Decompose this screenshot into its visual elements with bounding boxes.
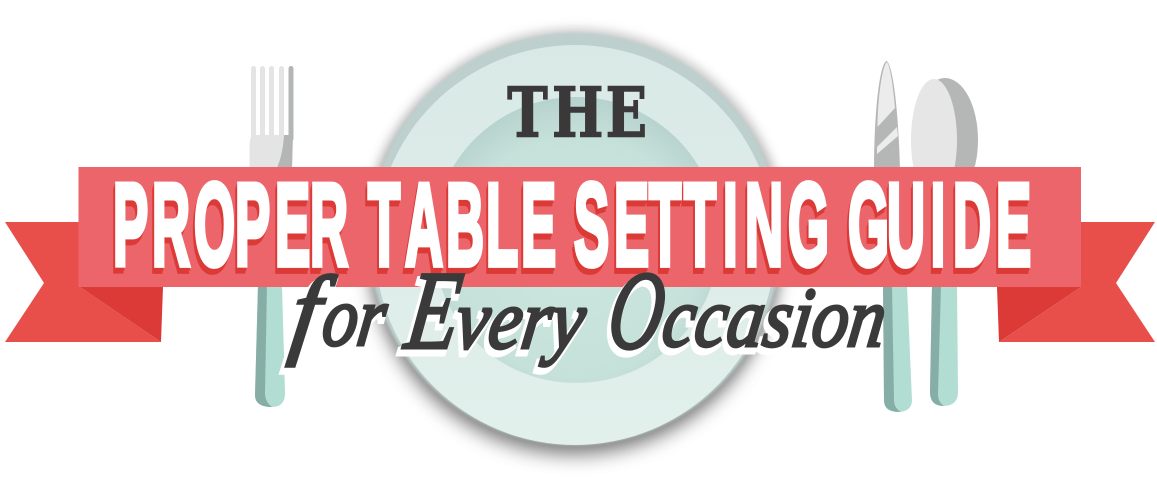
banner [78,167,1081,287]
subtitle lettering [285,249,892,373]
subtitle lettering: or [317,270,393,364]
plate well [433,97,719,383]
plate [366,28,786,456]
subtitle white shadow [282,254,889,378]
subtitle lettering: O [602,249,673,373]
subtitle white shadow: O [599,254,670,378]
icon: fork [250,66,294,407]
title: proper table setting guide: PROPER TABLE SETTING GUIDE [113,160,1031,291]
subtitle white shadow: very [447,278,589,372]
subtitle lettering: E [398,249,469,373]
subtitle lettering: ccasion [657,271,892,365]
heading: THE: THE [507,72,647,153]
icon: spoon [911,78,978,406]
subtitle lettering: very [450,273,592,367]
subtitle white shadow: f [282,260,337,372]
right ribbon tail [997,222,1155,342]
plate surface [375,45,775,445]
plate rim [369,33,781,445]
title: proper table setting guide: PROPER TABLE SETTING GUIDE [112,164,1030,294]
subtitle white shadow: or [314,275,390,369]
left ribbon tail [5,222,163,342]
subtitle lettering: f [285,255,340,367]
subtitle: for every occasion [282,249,892,378]
plate shadow [366,28,786,456]
icon: knife [874,61,912,412]
subtitle white shadow: ccasion [654,276,889,370]
title: proper table setting guide: PROPER TABLE SETTING GUIDE [111,167,1029,297]
subtitle white shadow: E [395,254,466,378]
